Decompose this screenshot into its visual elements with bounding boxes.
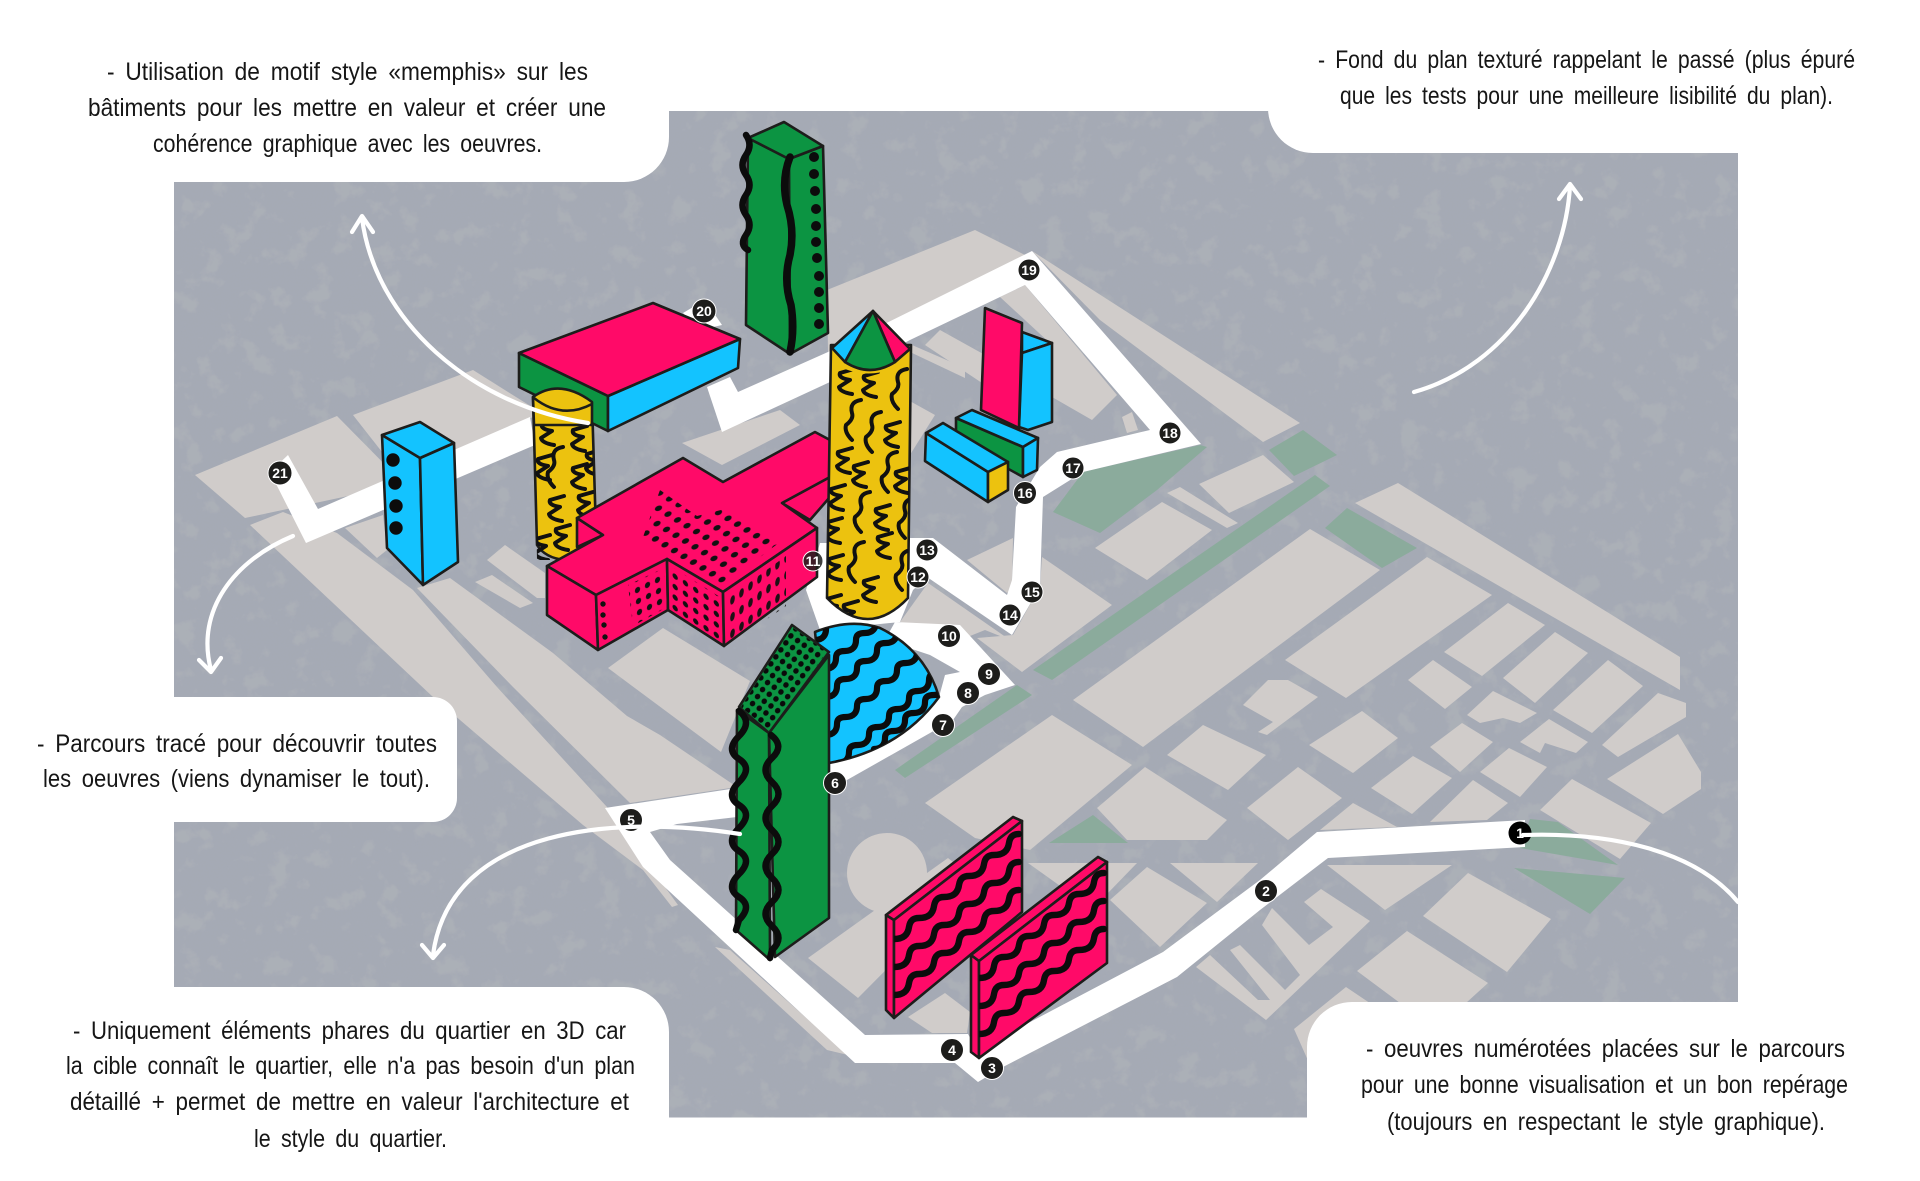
marker 9: 9 bbox=[985, 666, 993, 682]
marker 17 bbox=[1062, 457, 1084, 479]
text block: textured background: que les tests pour une meilleure lisibilité du plan). bbox=[1340, 82, 1833, 110]
text block: route: les oeuvres (viens dynamiser le tout). bbox=[43, 765, 430, 793]
text block: memphis patterns bbox=[88, 58, 606, 158]
marker 4: 4 bbox=[948, 1042, 956, 1058]
building: pink slab and blue block group bbox=[925, 308, 1052, 502]
route: white path bbox=[270, 251, 1525, 1082]
marker 12 bbox=[907, 566, 929, 588]
marker 7 bbox=[932, 714, 954, 736]
marker 21 bbox=[268, 461, 292, 485]
marker 19: 19 bbox=[1021, 262, 1037, 278]
marker 10 bbox=[938, 624, 960, 648]
building: magenta dotted cross bbox=[547, 432, 830, 650]
marker 6: 6 bbox=[831, 775, 839, 791]
text block: route bbox=[37, 730, 437, 793]
text block: numbered works: - oeuvres numérotées placées sur le parcours bbox=[1366, 1035, 1845, 1063]
marker 10: 10 bbox=[941, 628, 957, 644]
text block: numbered works bbox=[1361, 1035, 1848, 1136]
marker 7: 7 bbox=[939, 717, 947, 733]
building: yellow cylinder bbox=[533, 389, 601, 560]
marker 20 bbox=[692, 299, 716, 323]
marker 18: 18 bbox=[1162, 425, 1178, 441]
panel: top right bbox=[1268, 0, 1920, 153]
marker 3: 3 bbox=[988, 1060, 996, 1076]
text block: memphis patterns: - Utilisation de motif style «memphis» sur les bbox=[107, 58, 588, 86]
panel: middle left bbox=[0, 697, 457, 822]
text block: numbered works: (toujours en respectant le style graphique). bbox=[1387, 1108, 1825, 1136]
marker 1 bbox=[1508, 822, 1532, 844]
marker 13: 13 bbox=[919, 542, 935, 558]
artwork: first magenta wavy wall bbox=[886, 817, 1022, 1018]
marker 5: 5 bbox=[627, 812, 635, 828]
marker 16: 16 bbox=[1017, 485, 1033, 501]
marker 11 bbox=[803, 551, 823, 571]
arrow: 3D note bbox=[422, 827, 740, 958]
marker 8: 8 bbox=[964, 685, 972, 701]
artwork: second magenta wavy wall bbox=[971, 857, 1107, 1058]
marker 21: 21 bbox=[272, 465, 288, 481]
arrow: numbered works note bbox=[1523, 835, 1738, 902]
marker 20: 20 bbox=[696, 303, 712, 319]
marker 2 bbox=[1254, 880, 1278, 902]
marker 11: 11 bbox=[806, 553, 821, 569]
panel: bottom left bbox=[0, 987, 669, 1181]
arrow: route note bbox=[199, 536, 293, 672]
panel: bottom right bbox=[1307, 1002, 1920, 1181]
textured map background bbox=[174, 111, 1738, 1118]
marker 15 bbox=[1021, 581, 1043, 603]
building: blue wavy dome bbox=[814, 622, 940, 764]
map: green spaces bbox=[895, 430, 1625, 914]
text block: 3D landmarks: - Uniquement éléments phares du quartier en 3D car bbox=[73, 1017, 626, 1045]
marker 3 bbox=[980, 1056, 1004, 1080]
text block: 3D landmarks: le style du quartier. bbox=[254, 1125, 447, 1153]
text block: 3D landmarks: la cible connaît le quartier, elle n'a pas besoin d'un plan bbox=[66, 1052, 635, 1080]
marker 15: 15 bbox=[1024, 584, 1040, 600]
text block: 3D landmarks bbox=[66, 1017, 635, 1153]
marker 18 bbox=[1159, 422, 1181, 444]
map: building footprints bbox=[195, 230, 1701, 1065]
marker 4 bbox=[940, 1038, 964, 1062]
marker 12: 12 bbox=[910, 569, 926, 585]
arrow: texture note bbox=[1414, 184, 1581, 392]
marker 5 bbox=[620, 808, 642, 832]
building: blue box with dots bbox=[382, 422, 458, 585]
marker 19 bbox=[1018, 259, 1040, 281]
marker 6 bbox=[824, 772, 846, 794]
text block: numbered works: pour une bonne visualisation et un bon repérage bbox=[1361, 1071, 1848, 1099]
marker 9 bbox=[978, 662, 1000, 686]
building: magenta roof block bbox=[519, 303, 740, 431]
marker 16 bbox=[1014, 482, 1036, 504]
text block: textured background bbox=[1318, 46, 1855, 110]
text block: memphis patterns: bâtiments pour les mettre en valeur et créer une bbox=[88, 94, 606, 122]
marker 1: 1 bbox=[1516, 825, 1524, 841]
repaint of cylinder top over roof block bbox=[533, 389, 592, 425]
arrow: memphis note to roof block bbox=[352, 216, 588, 423]
marker 2: 2 bbox=[1262, 883, 1270, 899]
marker 8 bbox=[956, 682, 980, 704]
text block: memphis patterns: cohérence graphique avec les oeuvres. bbox=[153, 130, 542, 158]
marker 17: 17 bbox=[1065, 460, 1081, 476]
building: tall green tower with dots bbox=[742, 122, 828, 354]
building: yellow tower with cone bbox=[826, 311, 914, 626]
text block: route: - Parcours tracé pour découvrir toutes bbox=[37, 730, 437, 758]
panel: top left bbox=[0, 0, 669, 182]
text block: 3D landmarks: détaillé + permet de mettre en valeur l'architecture et bbox=[70, 1088, 629, 1116]
building: green wavy tower with dotted top bbox=[732, 625, 829, 960]
marker 13 bbox=[916, 539, 938, 561]
marker 14 bbox=[999, 604, 1021, 626]
marker 14: 14 bbox=[1002, 607, 1018, 623]
numbered markers bbox=[268, 259, 1532, 1080]
